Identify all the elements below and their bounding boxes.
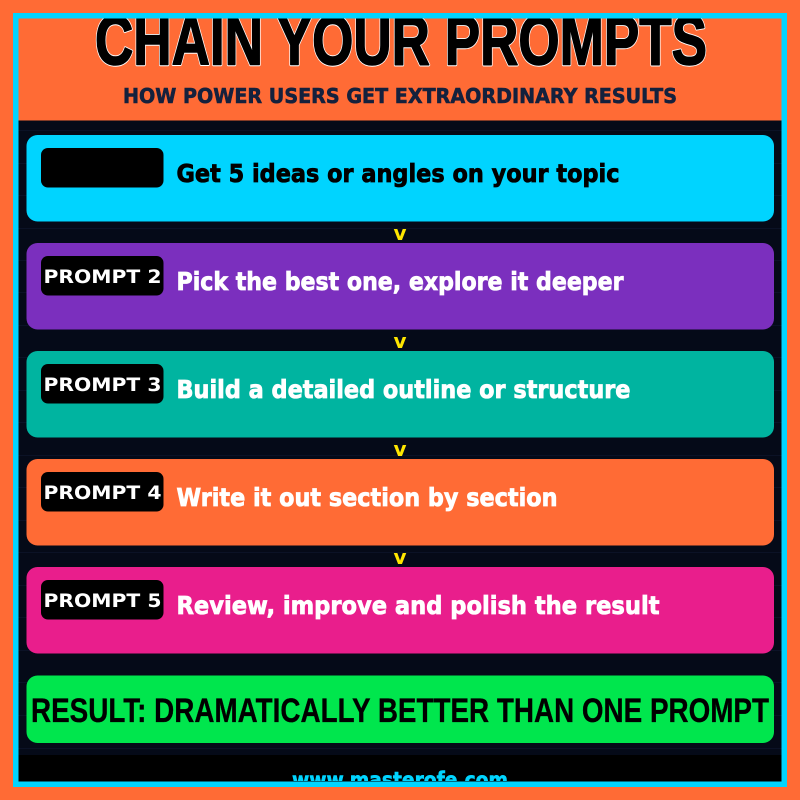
step 4 text: Write it out section by section xyxy=(176,483,558,512)
badge: prompt 2: PROMPT 2 xyxy=(44,266,162,288)
arrow 2: v xyxy=(393,329,407,353)
step 3 card xyxy=(26,351,774,438)
badge: prompt 1 xyxy=(41,148,164,188)
header band xyxy=(18,18,782,120)
badge: prompt 5 xyxy=(41,580,164,620)
arrow 3: v xyxy=(393,437,407,461)
step 2 text: Pick the best one, explore it deeper xyxy=(176,267,624,296)
badge: prompt 3: PROMPT 3 xyxy=(44,374,162,396)
badge: prompt 3 xyxy=(41,364,164,404)
step 2 card xyxy=(26,243,774,330)
badge: prompt 4 xyxy=(41,472,164,512)
footer url: www.masterofe.com xyxy=(292,768,508,792)
step 1 text: Get 5 ideas or angles on your topic xyxy=(176,159,620,188)
badge: prompt 2 xyxy=(41,256,164,296)
badge: prompt 4: PROMPT 4 xyxy=(44,482,162,504)
subtitle: HOW POWER USERS GET EXTRAORDINARY RESULTS xyxy=(123,84,677,108)
arrow 4: v xyxy=(393,545,407,569)
step 4 card xyxy=(26,459,774,546)
step 5 card xyxy=(26,567,774,654)
step 1 card xyxy=(26,135,774,222)
badge: prompt 5: PROMPT 5 xyxy=(44,590,162,612)
result banner xyxy=(26,676,774,743)
title xyxy=(96,18,706,67)
arrow 1: v xyxy=(393,221,407,245)
step 3 text: Build a detailed outline or structure xyxy=(176,375,630,404)
step 5 text: Review, improve and polish the result xyxy=(176,591,660,620)
